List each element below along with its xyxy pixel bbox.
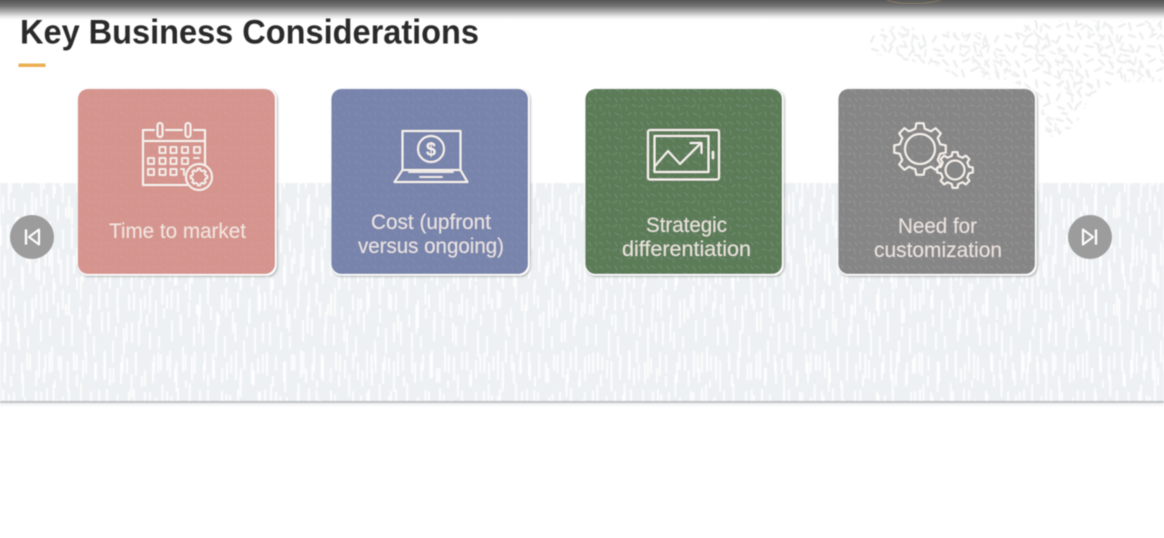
card: Need for customization bbox=[838, 89, 1036, 276]
label: Time to market: Time to market bbox=[109, 220, 246, 243]
label: Cost (upfront versus ongoing): Cost (upfront bbox=[371, 211, 491, 234]
icon: two gears bbox=[894, 123, 973, 188]
label: Cost (upfront versus ongoing) bbox=[358, 211, 504, 258]
icon: tablet with rising chart bbox=[648, 130, 719, 180]
card: Time to market bbox=[78, 89, 276, 276]
background band with rain texture bbox=[0, 183, 1164, 406]
label: Need for customization bbox=[874, 215, 1002, 262]
title accent underline bbox=[18, 64, 46, 67]
button: next bbox=[1068, 215, 1112, 259]
label: Cost (upfront versus ongoing): versus ongoing) bbox=[358, 235, 504, 258]
icon: calendar with gear bbox=[143, 123, 212, 190]
faint arc at top edge bbox=[887, 0, 940, 4]
card: Strategic differentiation bbox=[586, 89, 784, 276]
label: Strategic differentiation bbox=[622, 214, 751, 261]
label: Strategic differentiation: differentiation bbox=[622, 238, 751, 261]
icon: laptop with dollar: $ bbox=[426, 140, 436, 160]
icon: laptop with dollar bbox=[394, 131, 468, 182]
label: Strategic differentiation: Strategic bbox=[646, 214, 727, 237]
label: Need for customization: customization bbox=[874, 239, 1002, 262]
label: Need for customization: Need for bbox=[898, 215, 977, 238]
decorative leaf texture top right bbox=[868, 3, 1164, 137]
top shadow bar bbox=[0, 0, 1164, 20]
card: Cost (upfront versus ongoing) bbox=[332, 89, 530, 276]
button: previous bbox=[10, 215, 54, 259]
title: Key Business Considerations bbox=[20, 14, 479, 52]
